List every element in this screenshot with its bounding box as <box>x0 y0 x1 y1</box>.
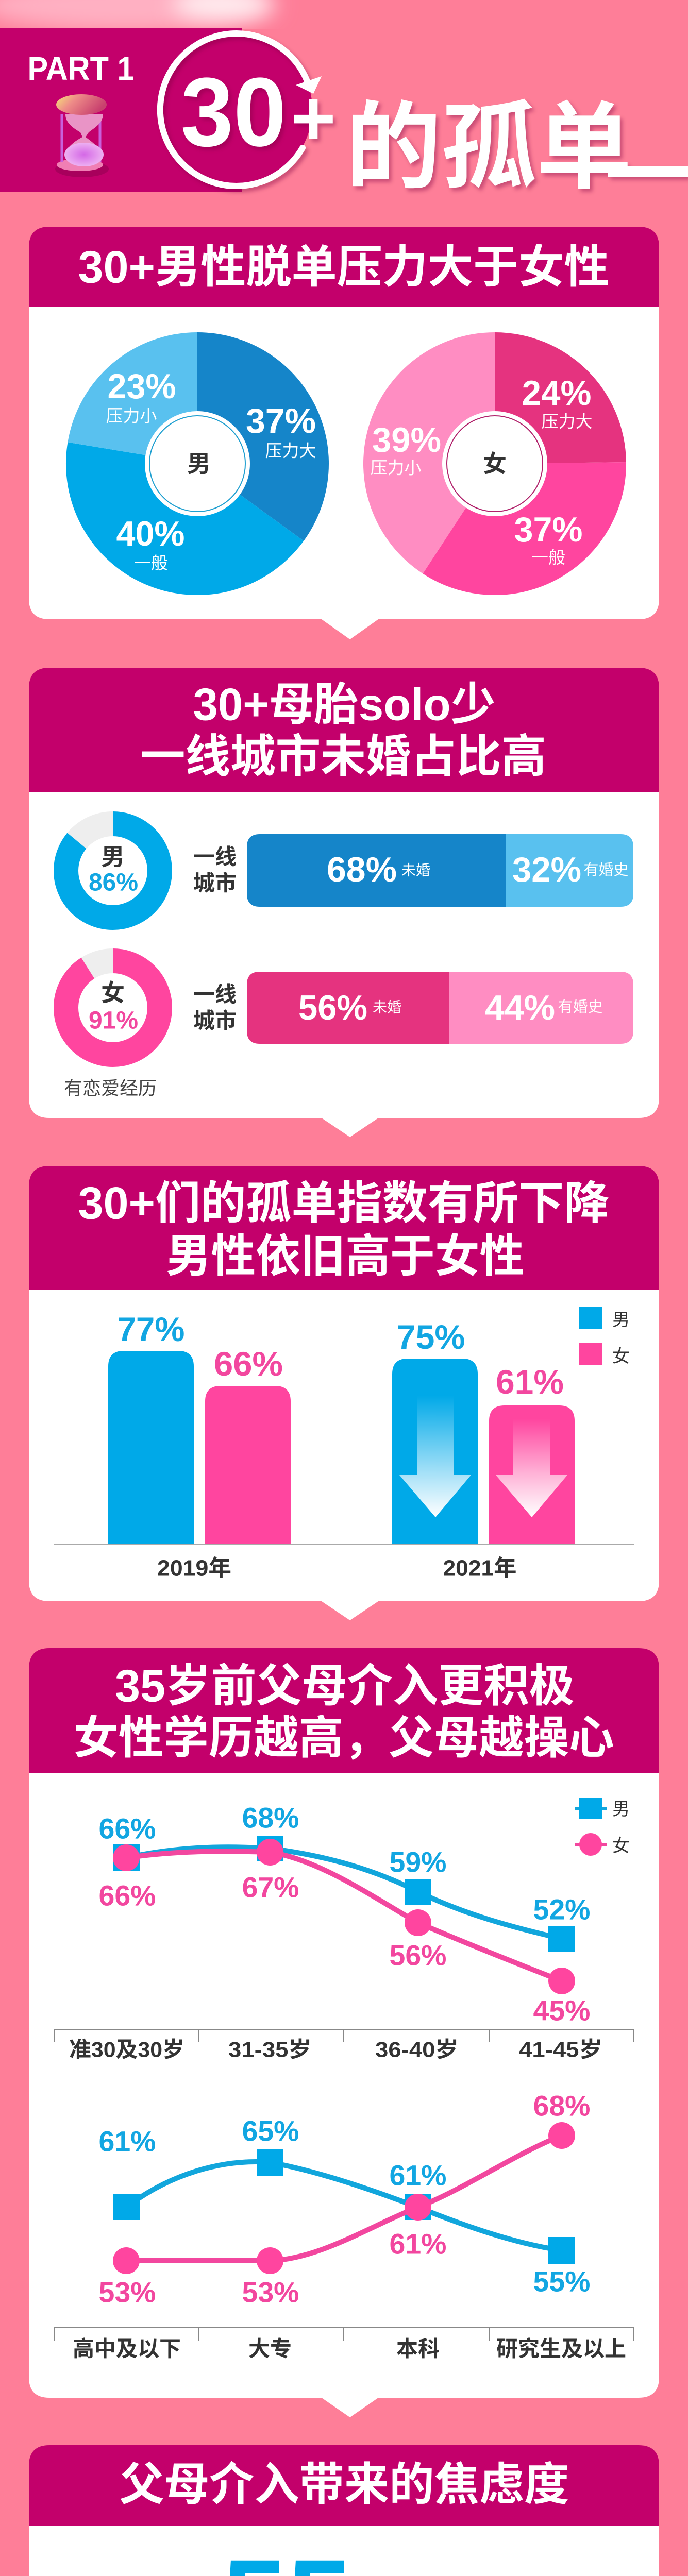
donut: male 86% <box>66 824 160 918</box>
line chart: by age: 52% <box>533 1893 591 1926</box>
donut: female 91%: 91% <box>89 1007 138 1035</box>
line chart: by education: 55% <box>533 2265 591 2298</box>
text: 30+: + <box>291 75 336 161</box>
legend <box>579 1307 630 1366</box>
line chart: by education: 本科 <box>396 2337 440 2361</box>
donut: male 86%: 男 <box>101 843 125 870</box>
line chart: by age: 68% <box>242 1801 299 1834</box>
heading <box>73 1660 614 1763</box>
stacked bar: female <box>247 972 633 1044</box>
line chart: by age: 45% <box>533 1994 591 2027</box>
text: 30+: 30 <box>180 58 287 167</box>
bar: 2019 female <box>205 1386 291 1544</box>
line chart: by education: 61% <box>390 2159 446 2192</box>
donut: female 91% <box>66 961 160 1055</box>
legend <box>575 1798 630 1856</box>
line chart: by age: 准30及30岁 <box>69 2037 184 2062</box>
panel header <box>29 227 659 307</box>
stacked bar: female: 56% <box>298 988 367 1027</box>
legend: 男 <box>612 1800 630 1819</box>
bar chart: 66% <box>214 1345 283 1383</box>
stacked bar: male: 未婚 <box>401 862 430 878</box>
stacked bar: female: 有婚史 <box>558 998 603 1015</box>
label: 一线城市 female <box>193 982 237 1032</box>
header: part 1 banner <box>0 28 688 201</box>
arrow: female decline <box>496 1419 567 1517</box>
bar chart: 77% <box>118 1310 184 1348</box>
heading: 男性依旧高于女性 <box>166 1230 525 1282</box>
heading: 30+母胎solo少 <box>193 679 496 730</box>
line chart: by education: 53% <box>99 2276 156 2308</box>
label: 一线城市 female: 一线 <box>193 982 237 1007</box>
bar: 2021 female <box>489 1405 575 1544</box>
bar chart <box>54 1310 634 1581</box>
bar chart: 2019年 <box>157 1556 231 1581</box>
pie chart: female: 女 <box>483 450 507 477</box>
pie chart: male: 23% <box>107 367 176 406</box>
panel: loneliness index <box>29 1166 659 1620</box>
bar: 2021 male <box>392 1359 478 1544</box>
line chart: by age: 31-35岁 <box>228 2037 312 2062</box>
bar chart: 2021年 <box>443 1556 516 1581</box>
line chart: by education: 68% <box>533 2090 591 2122</box>
stacked bar: male: 有婚史 <box>583 861 629 878</box>
panel header <box>29 668 659 792</box>
line chart: by education: 61% <box>390 2228 446 2260</box>
pie chart: female: 压力小 <box>370 459 422 477</box>
line chart: by education: 53% <box>242 2276 299 2308</box>
label: 一线城市 male: 一线 <box>193 845 237 869</box>
panel body <box>29 1290 659 1620</box>
pie chart: female: 24% <box>522 374 592 413</box>
pie chart: female: 压力大 <box>541 412 593 431</box>
pie chart: female: 37% <box>514 510 582 549</box>
heading: 35岁前父母介入更积极 <box>115 1660 575 1711</box>
heading: 30+们的孤单指数有所下降 <box>78 1178 609 1228</box>
text: 的孤单: 的孤单 <box>346 95 632 201</box>
icon: hourglass <box>55 94 109 177</box>
donut: female 91%: 女 <box>101 979 125 1006</box>
legend: 男 <box>612 1310 630 1330</box>
heading <box>78 1178 609 1282</box>
stacked bar: female: 未婚 <box>373 999 401 1015</box>
panel: anxiety <box>29 2445 659 2576</box>
stacked bar: male: 68% <box>327 850 397 889</box>
pie chart: male: 压力小 <box>106 406 157 426</box>
panel header <box>29 2445 659 2526</box>
panel body <box>29 307 659 639</box>
line chart: by education: 研究生及以上 <box>496 2337 626 2361</box>
pie chart: female <box>363 332 626 595</box>
pie chart: male: 男 <box>187 450 211 477</box>
line chart: by education: 大专 <box>248 2337 292 2361</box>
heading <box>140 679 546 782</box>
line chart: by age: 56% <box>390 1939 446 1971</box>
line chart: by education: 61% <box>99 2125 156 2158</box>
pie chart: male: 37% <box>246 401 316 440</box>
line chart: by age: 67% <box>242 1871 299 1903</box>
donut: male 86%: 86% <box>89 869 138 896</box>
stacked bar: male: 32% <box>512 850 581 889</box>
legend: 女 <box>612 1836 630 1856</box>
panel header <box>29 1166 659 1290</box>
heading: 父母介入带来的焦虑度 <box>120 2459 569 2510</box>
legend: 女 <box>612 1347 630 1366</box>
line chart: by age <box>54 1801 634 2062</box>
line chart: by age: 59% <box>390 1845 446 1878</box>
panel header <box>29 1648 659 1773</box>
pie chart: female: 39% <box>372 420 441 460</box>
label: 一线城市 female: 城市 <box>193 1009 237 1032</box>
arrow: male decline <box>399 1396 471 1517</box>
icon: circular arrow disc <box>160 33 322 186</box>
panel body <box>29 1773 659 2417</box>
line chart: by age: 66% <box>99 1812 156 1844</box>
text: PART 1: PART 1 <box>28 50 134 87</box>
stacked bar: male <box>247 834 633 907</box>
heading: 30+男性脱单压力大于女性 <box>78 241 609 293</box>
heading: 女性学历越高，父母越操心 <box>73 1713 614 1763</box>
panel body <box>29 792 659 1137</box>
label: 一线城市 male <box>193 845 237 895</box>
panel body <box>29 2526 659 2576</box>
line chart: by education: 65% <box>242 2114 299 2147</box>
pie chart: male: 40% <box>116 514 184 553</box>
pie chart: male <box>66 332 329 595</box>
line chart: by education: 高中及以下 <box>73 2337 181 2361</box>
bar chart: 75% <box>397 1318 465 1356</box>
pie chart: male: 压力大 <box>265 441 316 461</box>
line chart: by age: 41-45岁 <box>519 2037 602 2062</box>
panel: male vs female pressure <box>29 227 659 639</box>
pie chart: female: 一般 <box>531 548 565 567</box>
line chart: by age: 36-40岁 <box>375 2037 459 2062</box>
line chart: by education <box>54 2090 634 2361</box>
pie chart: male: 一般 <box>134 553 168 573</box>
bar chart: 61% <box>496 1363 564 1401</box>
panel: solo and first-tier cities <box>29 668 659 1137</box>
caption: 有恋爱经历 <box>64 1078 157 1098</box>
stacked bar: female: 44% <box>485 988 555 1027</box>
bar: 2019 male <box>108 1351 194 1544</box>
label: 一线城市 male: 城市 <box>193 871 237 895</box>
line chart: by age: 66% <box>99 1879 156 1911</box>
panel: parental involvement <box>29 1648 659 2417</box>
heading: 一线城市未婚占比高 <box>140 731 546 782</box>
